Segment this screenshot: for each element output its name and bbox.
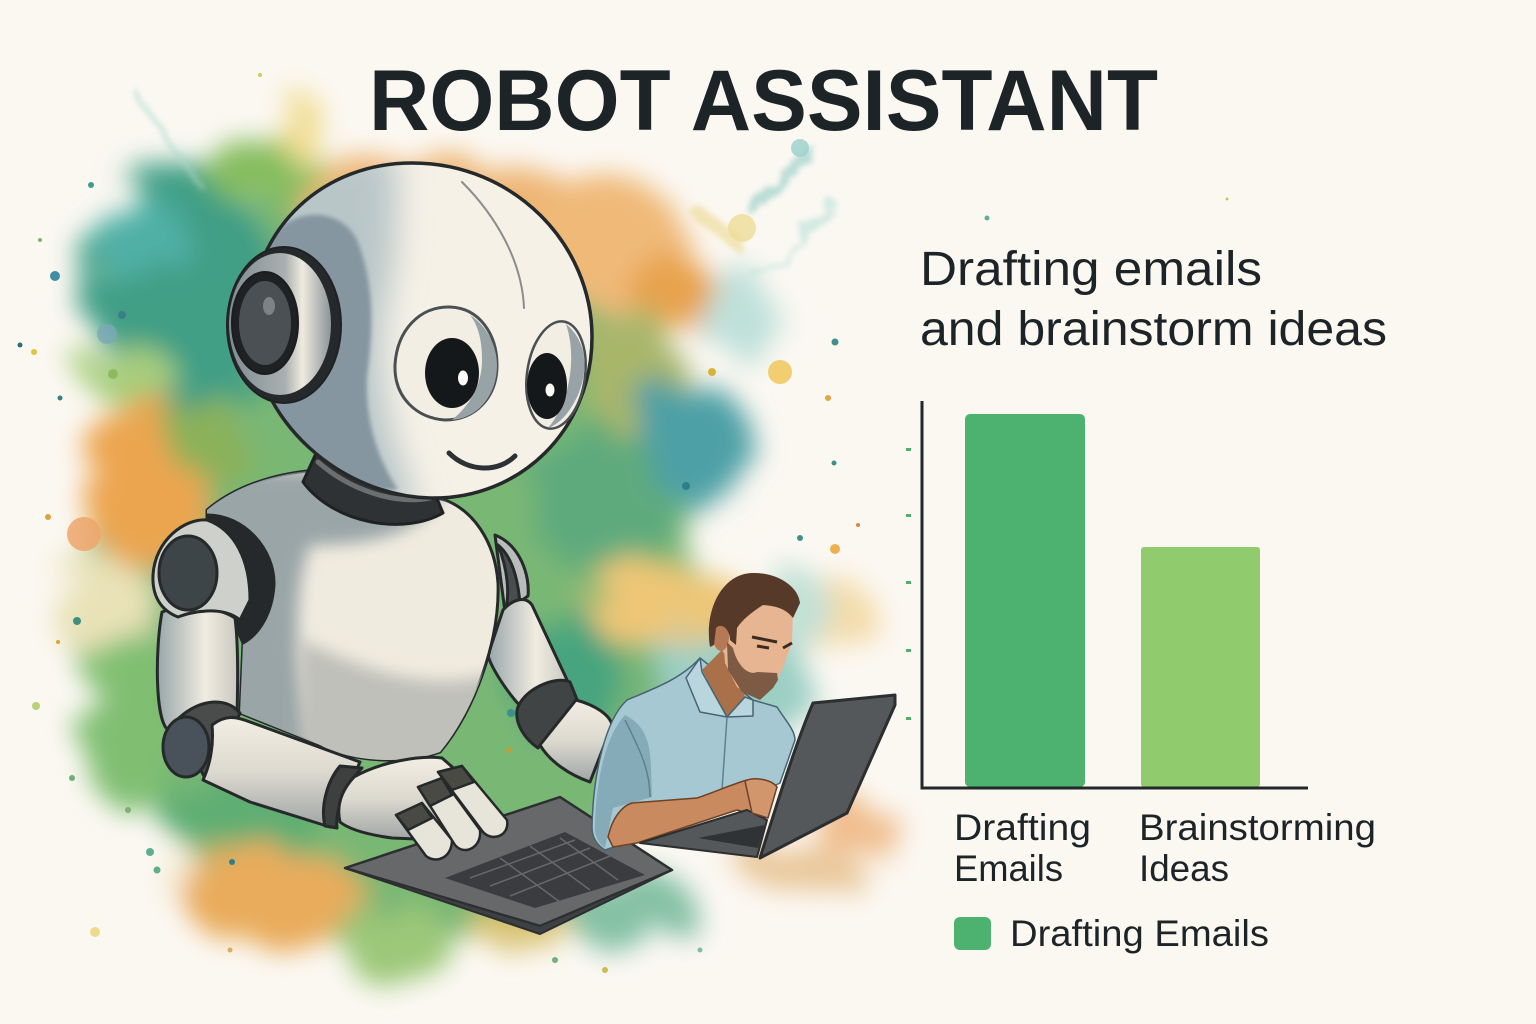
label: drafting emails: Emails: [954, 848, 1063, 889]
head shading: [270, 165, 428, 496]
robot left arm: [153, 515, 490, 840]
forearm: [608, 779, 777, 847]
robot right arm: [488, 535, 612, 782]
bar: brainstorming ideas: [1141, 547, 1260, 787]
torso lower shadow: [293, 638, 486, 760]
bar: drafting emails: [965, 414, 1085, 787]
label: drafting emails: Drafting: [954, 807, 1091, 848]
keys: [445, 832, 645, 908]
shirt folds: [625, 717, 727, 797]
robot illustration: [153, 150, 612, 859]
face: [722, 595, 793, 700]
label: brainstorming ideas: Ideas: [1139, 848, 1229, 889]
bar chart: [906, 401, 1376, 889]
collar: [686, 658, 753, 717]
hand: [745, 779, 777, 818]
forearm: [203, 717, 360, 827]
keyboard front edge: [345, 868, 672, 934]
chart title: and brainstorm ideas: [920, 303, 1387, 356]
robot torso: [206, 470, 500, 762]
elbow: [175, 702, 240, 778]
robot fingers: [396, 766, 507, 859]
chart title: Drafting emails: [920, 243, 1262, 296]
hand: [339, 757, 490, 840]
hair: [709, 573, 800, 647]
shoulder band: [207, 515, 274, 643]
laptop screen: [760, 695, 895, 858]
robot keyboard: [345, 797, 672, 934]
shoulder cap: [153, 520, 250, 620]
chart title: [920, 243, 1387, 356]
laptop base: [640, 810, 767, 857]
head outline: [250, 163, 592, 498]
upper arm: [157, 607, 238, 730]
splash streaks: [132, 88, 832, 280]
man's laptop: [640, 695, 895, 858]
chart axes: [922, 401, 1308, 788]
smile: [449, 453, 515, 468]
ear: [713, 623, 729, 651]
left eye: [395, 307, 497, 420]
head shell: [250, 163, 592, 498]
beard: [727, 642, 778, 700]
axis ticks: [906, 448, 911, 720]
man at laptop: [592, 573, 800, 850]
ear lens: [227, 247, 341, 403]
watercolor splash: [55, 88, 905, 985]
shirt shadow: [595, 715, 652, 848]
laptop trackpad keys: [698, 825, 765, 848]
paint splatter dots: [18, 73, 1228, 973]
right eye: [520, 317, 592, 433]
label: brainstorming ideas: Brainstorming: [1139, 807, 1376, 848]
label: brainstorming ideas: [1139, 807, 1376, 889]
man eye and brow: [752, 637, 792, 648]
legend: Drafting Emails: [1010, 913, 1269, 954]
title: ROBOT ASSISTANT: [369, 53, 1158, 149]
head seam: [462, 182, 524, 308]
shoulder ball: [159, 536, 217, 610]
label: drafting emails: [954, 807, 1091, 889]
neck: [702, 650, 745, 717]
shirt: [592, 658, 795, 850]
robot neck: [303, 440, 443, 524]
robot head: [227, 150, 592, 510]
wrist band: [323, 766, 362, 828]
torso upper shadow: [207, 471, 450, 745]
